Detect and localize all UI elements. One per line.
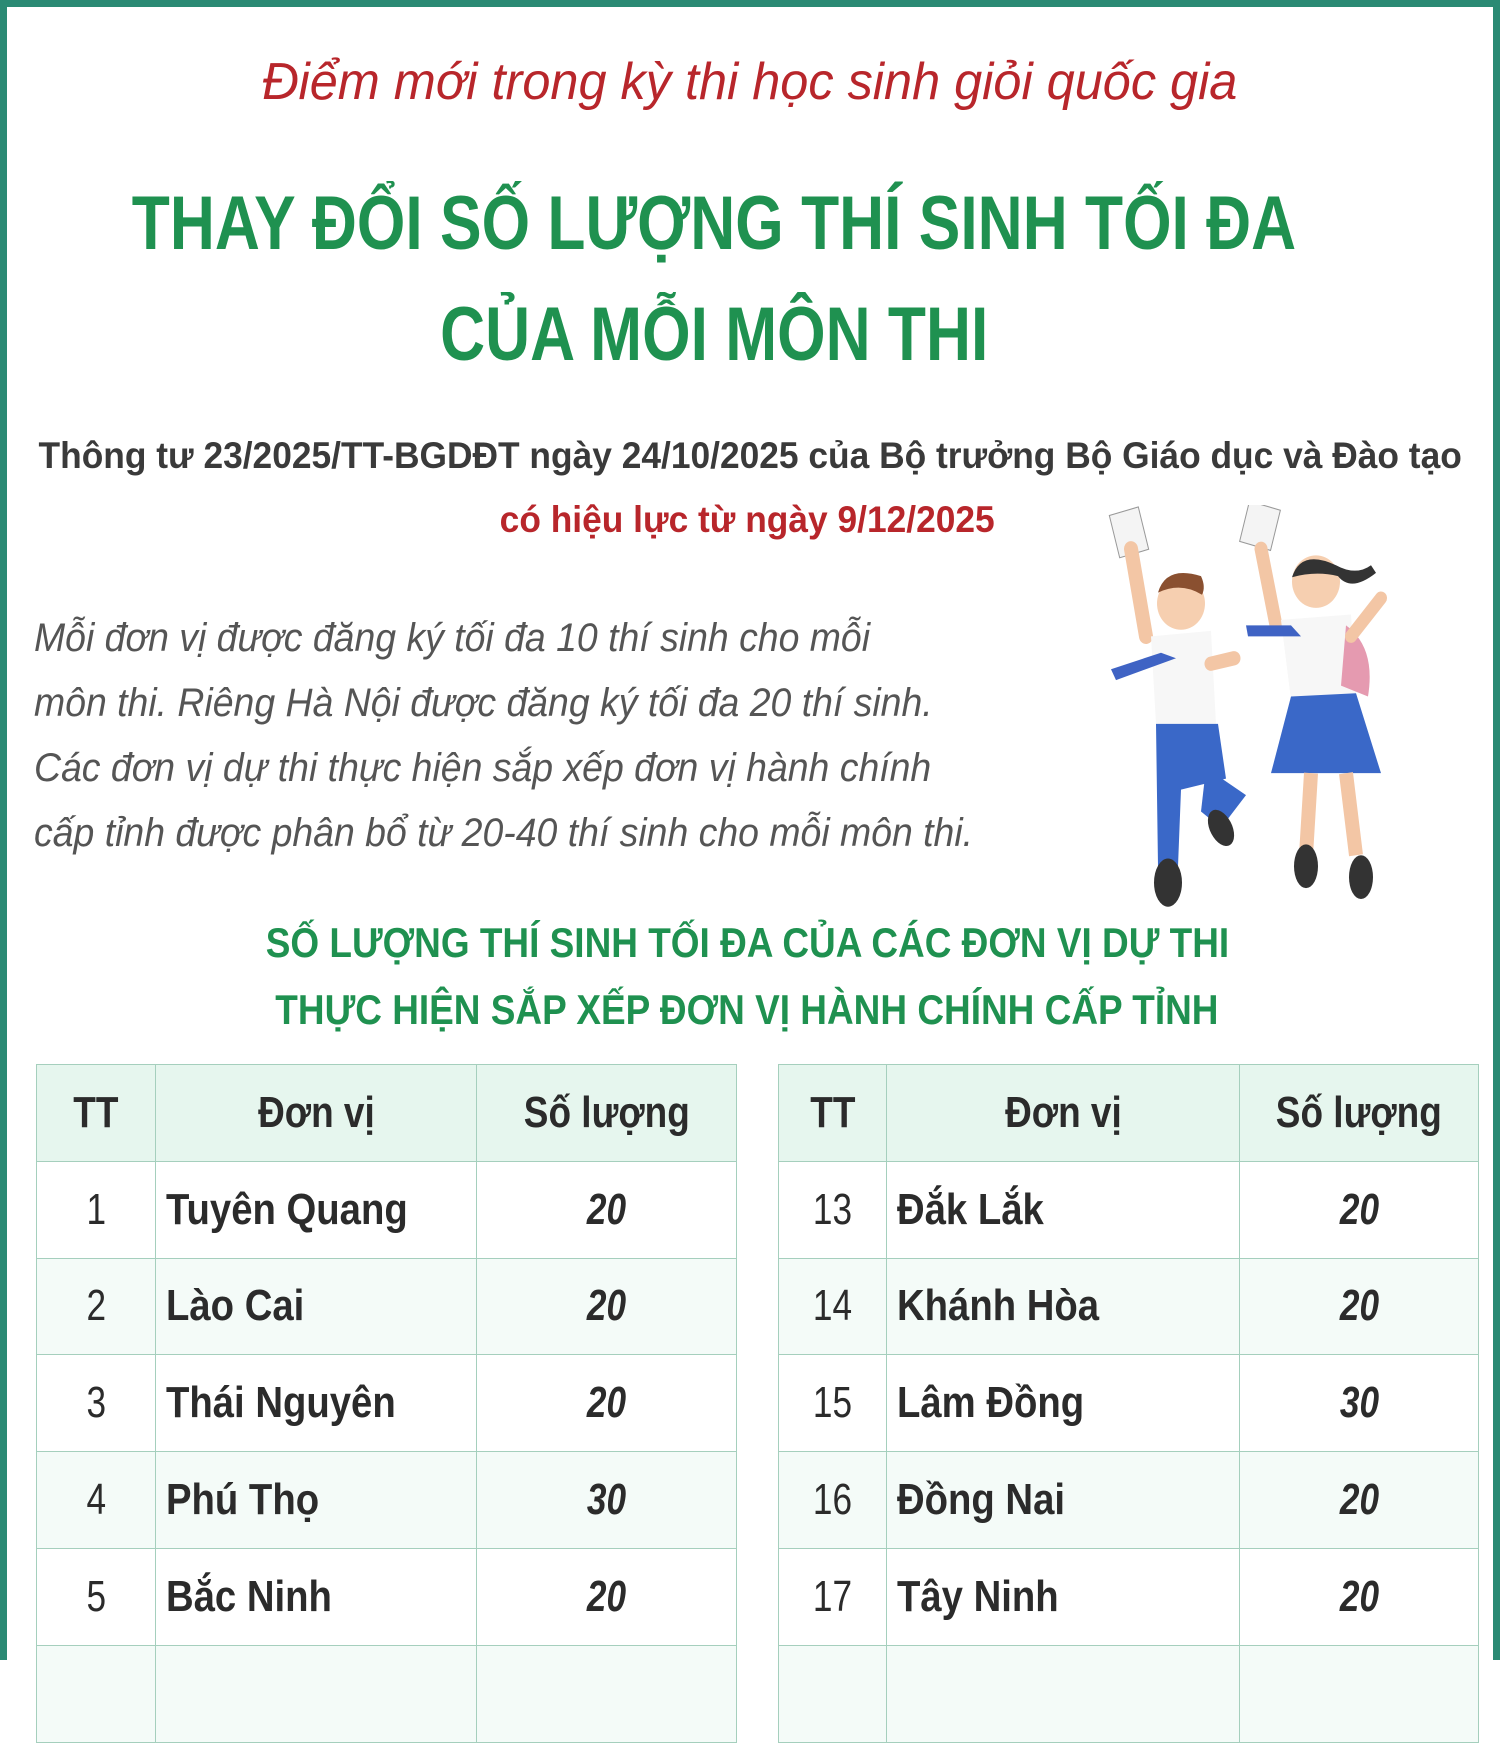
table right: Đồng Nai [897, 1475, 1065, 1524]
legal reference: Thông tư 23/2025/TT-BGDĐT ngày 24/10/2025 của Bộ trưởng Bộ Giáo dục và Đào tạo [38, 435, 1462, 476]
table right: 17 [813, 1572, 852, 1621]
table right: Lâm Đồng [897, 1378, 1084, 1427]
table left: 4 [86, 1475, 106, 1524]
table left: 20 [587, 1185, 626, 1234]
table right: 13 [813, 1185, 852, 1234]
title: CỦA MỖI MÔN THI [440, 292, 988, 377]
table right: TT [810, 1088, 855, 1137]
table left: Thái Nguyên [166, 1378, 396, 1427]
description text: môn thi. Riêng Hà Nội được đăng ký tối đa 20 thí sinh. [34, 681, 933, 725]
table right: 20 [1339, 1572, 1379, 1621]
table left: 30 [587, 1475, 626, 1524]
table right: Số lượng [1276, 1088, 1442, 1137]
description text: cấp tỉnh được phân bổ từ 20-40 thí sinh cho mỗi môn thi. [34, 811, 973, 855]
table left: Phú Thọ [166, 1475, 319, 1524]
section heading: SỐ LƯỢNG THÍ SINH TỐI ĐA CỦA CÁC ĐƠN VỊ DỰ THI [265, 919, 1229, 966]
section heading [265, 919, 1229, 1033]
illustration: jumping students [1108, 505, 1387, 907]
table left: Tuyên Quang [166, 1185, 408, 1234]
table left: Bắc Ninh [166, 1572, 332, 1621]
subtitle: Điểm mới trong kỳ thi học sinh giỏi quốc gia [262, 53, 1238, 111]
description text [34, 616, 973, 855]
legal reference [38, 435, 1462, 540]
table left: 20 [587, 1281, 626, 1330]
table left: 20 [587, 1572, 626, 1621]
title: THAY ĐỔI SỐ LƯỢNG THÍ SINH TỐI ĐA [132, 181, 1296, 266]
table right: 30 [1339, 1378, 1379, 1427]
table right: 20 [1339, 1475, 1379, 1524]
table right: 20 [1339, 1185, 1379, 1234]
table right: 15 [813, 1378, 852, 1427]
table left: TT [73, 1088, 119, 1137]
table left: Số lượng [524, 1088, 689, 1137]
table right: Đắk Lắk [897, 1185, 1044, 1234]
table right: Tây Ninh [897, 1572, 1059, 1621]
table left: 20 [587, 1378, 626, 1427]
table right [778, 1064, 1479, 1743]
table right: Đơn vị [1005, 1088, 1121, 1137]
table left: 2 [86, 1281, 106, 1330]
table right: 16 [813, 1475, 852, 1524]
description text: Mỗi đơn vị được đăng ký tối đa 10 thí sinh cho mỗi [34, 616, 870, 660]
title [132, 181, 1296, 377]
table left [36, 1064, 737, 1743]
table right: Khánh Hòa [897, 1281, 1099, 1330]
table left: 3 [86, 1378, 106, 1427]
table left: 1 [86, 1185, 106, 1234]
description text: Các đơn vị dự thi thực hiện sắp xếp đơn vị hành chính [34, 746, 931, 790]
section heading: THỰC HIỆN SẮP XẾP ĐƠN VỊ HÀNH CHÍNH CẤP TỈNH [275, 986, 1219, 1033]
table left: 5 [86, 1572, 106, 1621]
table left: Đơn vị [258, 1088, 374, 1137]
table left: Lào Cai [166, 1281, 304, 1330]
legal reference: có hiệu lực từ ngày 9/12/2025 [499, 499, 995, 540]
table right: 20 [1339, 1281, 1379, 1330]
table right: 14 [813, 1281, 852, 1330]
